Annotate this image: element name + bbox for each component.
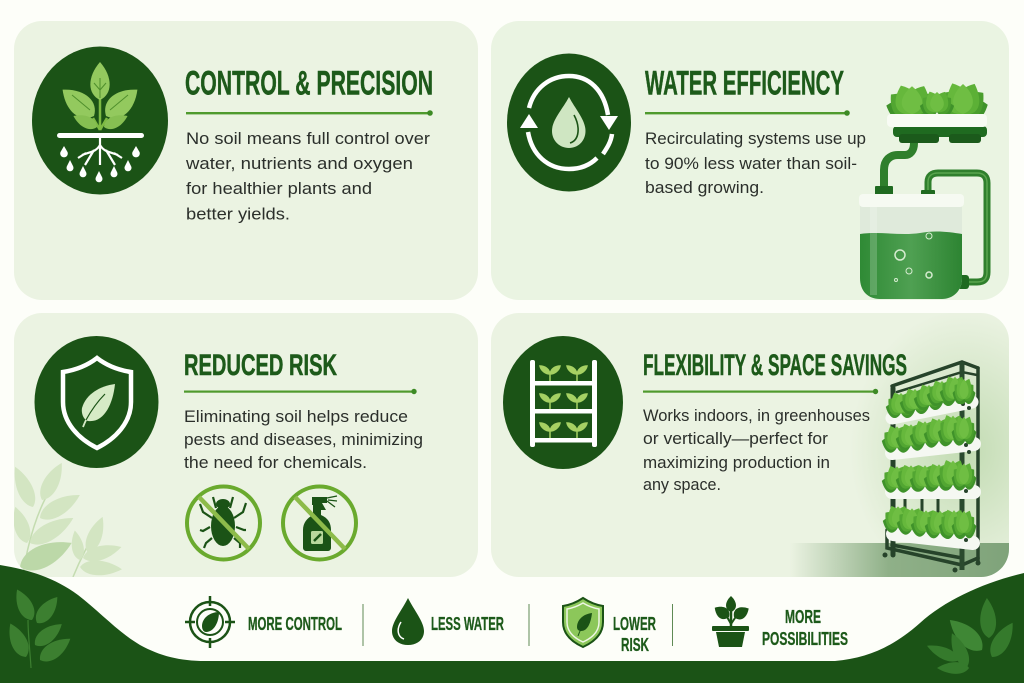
- heading: CONTROL & PRECISION: [185, 64, 433, 102]
- decorative leaves: bottom right: [925, 598, 1019, 674]
- benefit strip: more possibilities: [712, 596, 848, 649]
- icon: no chemical spray: [283, 486, 356, 560]
- icon: potted plant: [712, 596, 752, 647]
- illustration: vertical hydroponic rack: [880, 362, 980, 572]
- label: MORE: [785, 607, 821, 627]
- body text: Recirculating systems use up: [645, 129, 866, 148]
- body text: water, nutrients and oxygen: [185, 154, 413, 173]
- body text: [184, 407, 423, 472]
- icon: water drop: [392, 598, 424, 645]
- bottom wave band: [0, 565, 1024, 683]
- divider: [528, 604, 530, 646]
- panel: reduced risk: [8, 313, 478, 577]
- body text: Works indoors, in greenhouses: [643, 406, 870, 425]
- panel: water efficiency: [491, 21, 1009, 300]
- body text: the need for chemicals.: [184, 453, 367, 472]
- label: POSSIBILITIES: [762, 629, 848, 649]
- label: RISK: [621, 635, 649, 655]
- body text: No soil means full control over: [186, 129, 430, 148]
- icon: shield with leaf: [563, 598, 603, 647]
- decorative leaves: bottom left: [3, 586, 75, 668]
- panel: flexibility and space savings: [491, 310, 1024, 590]
- body text: [185, 129, 430, 224]
- divider: [362, 604, 364, 646]
- tier 2: [880, 411, 978, 455]
- benefit strip: lower risk: [563, 598, 656, 655]
- body text: [645, 129, 866, 197]
- benefit strip: more control: [185, 596, 342, 648]
- label: LOWER: [613, 614, 656, 634]
- divider: [672, 604, 673, 646]
- icon: vertical rack with seedlings: [503, 336, 623, 469]
- icon: recirculating water drop: [507, 54, 631, 192]
- body text: better yields.: [186, 204, 290, 224]
- tier 4: [881, 503, 978, 543]
- icon: plant with roots: [32, 46, 168, 194]
- body text: any space.: [643, 475, 721, 494]
- tier 3: [880, 456, 978, 495]
- heading: REDUCED RISK: [184, 349, 337, 382]
- heading rule: [645, 110, 850, 116]
- decorative faded leaves: [8, 459, 123, 577]
- heading: WATER EFFICIENCY: [645, 64, 844, 102]
- icon: no pests: [187, 486, 260, 560]
- icon: target leaf: [185, 596, 235, 648]
- label: LESS WATER: [431, 614, 504, 634]
- body text: to 90% less water than soil-: [645, 154, 857, 173]
- heading rule: [643, 389, 878, 394]
- benefit strip: less water: [392, 598, 504, 645]
- body text: Eliminating soil helps reduce: [184, 407, 408, 426]
- body text: maximizing production in: [643, 453, 830, 472]
- body text: based growing.: [645, 178, 764, 197]
- body text: for healthier plants and: [186, 179, 372, 198]
- icon: shield with leaf: [34, 336, 158, 468]
- body text: or vertically—perfect for: [643, 429, 828, 448]
- tier 1: [884, 373, 977, 420]
- body text: [643, 406, 870, 494]
- background wash and floor: [799, 334, 1009, 577]
- body text: pests and diseases, minimizing: [184, 430, 423, 449]
- heading rule: [184, 389, 417, 394]
- label: [613, 614, 656, 655]
- heading rule: [186, 110, 433, 116]
- illustration: hydroponic tank with lettuce tray: [859, 78, 991, 299]
- label: MORE CONTROL: [248, 614, 342, 634]
- label: [762, 607, 848, 649]
- panel: control and precision: [14, 21, 478, 300]
